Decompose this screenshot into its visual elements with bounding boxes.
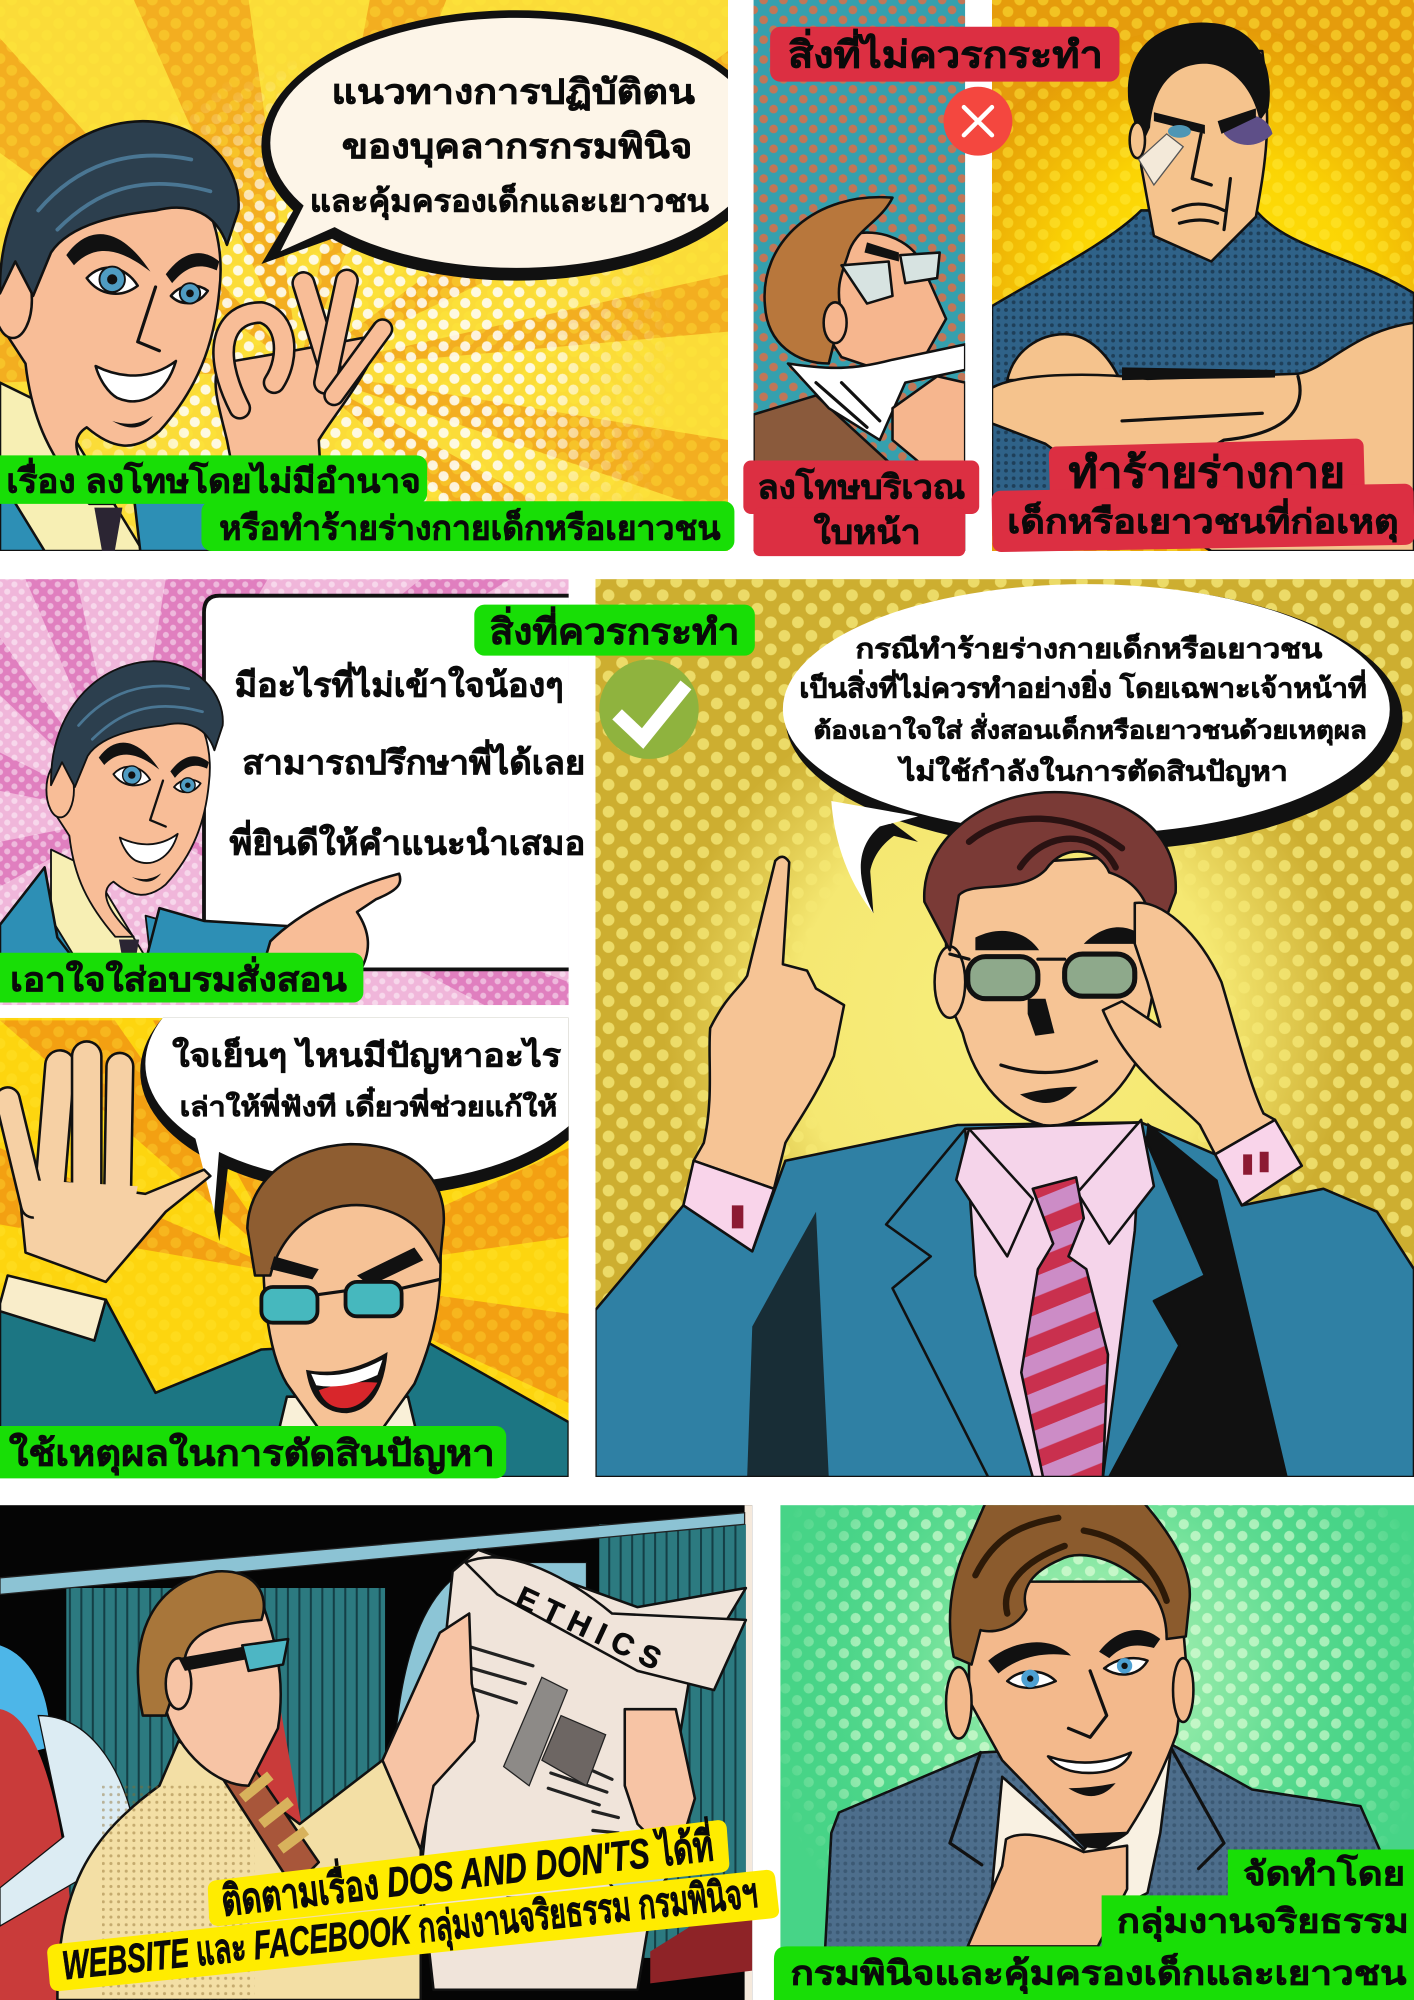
main bubble text: ไม่ใช้กำลังในการตัดสินปัญหา [897,756,1288,788]
speech bubble [140,1018,569,1241]
icon: red cross [944,87,1012,156]
figure: man with dark hair [0,121,242,551]
panel: man pointing at viewer [780,1505,1414,1948]
panel: introduction with speech bubble [0,0,771,551]
label: topic line: หรือทำร้ายร่างกายเด็กหรือเยาวชน [219,508,721,548]
speech bubble [261,10,771,281]
headline text on newspaper: ETHICS [511,1580,666,1677]
label: produced by [774,1849,1414,2000]
speech bubble [783,584,1403,913]
icon: OK hand gesture [212,268,394,456]
icon: raised finger hand [683,857,844,1251]
label: punish on face: ลงโทษบริเวณ [757,468,965,507]
main bubble text: เป็นสิ่งที่ไม่ควรทำอย่างยิ่ง โดยเฉพาะเจ้าหน้าที่ [799,669,1367,704]
icon: hand adjusting glasses [1103,903,1302,1205]
label: follow dos and don'ts: ติดตามเรื่อง DOS AND DON'TS ได้ที่ [218,1816,716,1925]
label: physical abuse: เด็กหรือเยาวชนที่ก่อเหตุ [1007,498,1399,543]
icon: green check [599,659,699,759]
label: attention and teaching [0,953,363,1003]
label: punish on face [743,460,979,556]
figure: man in beige suit [57,1571,421,2000]
label: topic line: เรื่อง ลงโทษโดยไม่มีอำนาจ [6,457,421,500]
label: follow dos and don'ts [47,1816,779,1992]
icon: raised open hand [0,1056,210,1341]
main bubble text: ต้องเอาใจใส่ สั่งสอนเด็กหรือเยาวชนด้วยเหตุผล [813,713,1367,747]
label: should do [474,605,755,656]
cabin curtains and window [0,1513,746,2000]
figure: man in blue suit [595,792,1414,1477]
figure: man pointing [46,661,225,971]
label: produced by: กลุ่มงานจริยธรรม [1117,1903,1409,1942]
main bubble text: กรณีทำร้ายร่างกายเด็กหรือเยาวชน [856,632,1323,664]
whiteboard text: สามารถปรึกษาพี่ได้เลย [242,739,585,782]
label: use reason: ใช้เหตุผลในการตัดสินปัญหา [9,1433,495,1476]
label: do not do [770,27,1119,82]
whiteboard text: พี่ยินดีให้คำแนะนำเสมอ [230,820,585,863]
panel: muscular man with bruise [992,0,1414,551]
label: produced by: กรมพินิจและคุ้มครองเด็กและเยาวชน [791,1953,1407,1995]
icon: ethics newspaper and hands [383,1550,752,1990]
bubble text [172,1035,561,1122]
label: topic line [0,455,734,551]
bubble heading text [310,73,709,221]
panel: man slapped on the face [754,0,965,551]
label: physical abuse: ทำร้ายร่างกาย [1068,449,1345,496]
label: physical abuse [991,438,1414,552]
bubble text: เล่าให้พี่ฟังที เดี๋ยวพี่ช่วยแก้ให้ [180,1086,557,1122]
figure: man grabbed by collar [754,197,965,551]
bubble heading text: และคุ้มครองเด็กและเยาวชน [310,183,709,221]
label: produced by: จัดทำโดย [1243,1854,1405,1893]
label: follow dos and don'ts: WEBSITE และ FACEBOOK กลุ่มงานจริยธรรม กรมพินิจฯ [60,1870,760,1992]
bubble heading text: แนวทางการปฏิบัติตน [332,73,695,111]
panel: man reading ethics newspaper [0,1505,752,2000]
panel: main advice from man with glasses [595,579,1414,1477]
whiteboard text: มีอะไรที่ไม่เข้าใจน้องๆ [235,661,564,704]
suit shoulders and pointing hand [0,866,402,968]
whiteboard [204,596,587,969]
whiteboard text [230,661,585,863]
figure: man in grey-blue suit [824,1505,1381,1946]
figure: man with teal glasses laughing [0,1144,569,1477]
label: should do: สิ่งที่ควรกระทำ [490,606,740,652]
label: attention and teaching: เอาใจใส่อบรมสั่งสอน [10,956,347,999]
bubble heading text: ของบุคลากรกรมพินิจ [342,128,692,168]
icon: pointing hand [968,1832,1128,1946]
panel: man calming with raised hand [0,1018,569,1477]
bubble text: ใจเย็นๆ ไหนมีปัญหาอะไร [172,1035,561,1074]
label: use reason [0,1426,506,1478]
figure: man with crossed arms [992,22,1414,551]
panel: man at whiteboard [0,579,587,1005]
label: do not do: สิ่งที่ไม่ควรกระทำ [788,29,1103,76]
main bubble text [799,632,1367,788]
label: punish on face: ใบหน้า [813,512,921,551]
